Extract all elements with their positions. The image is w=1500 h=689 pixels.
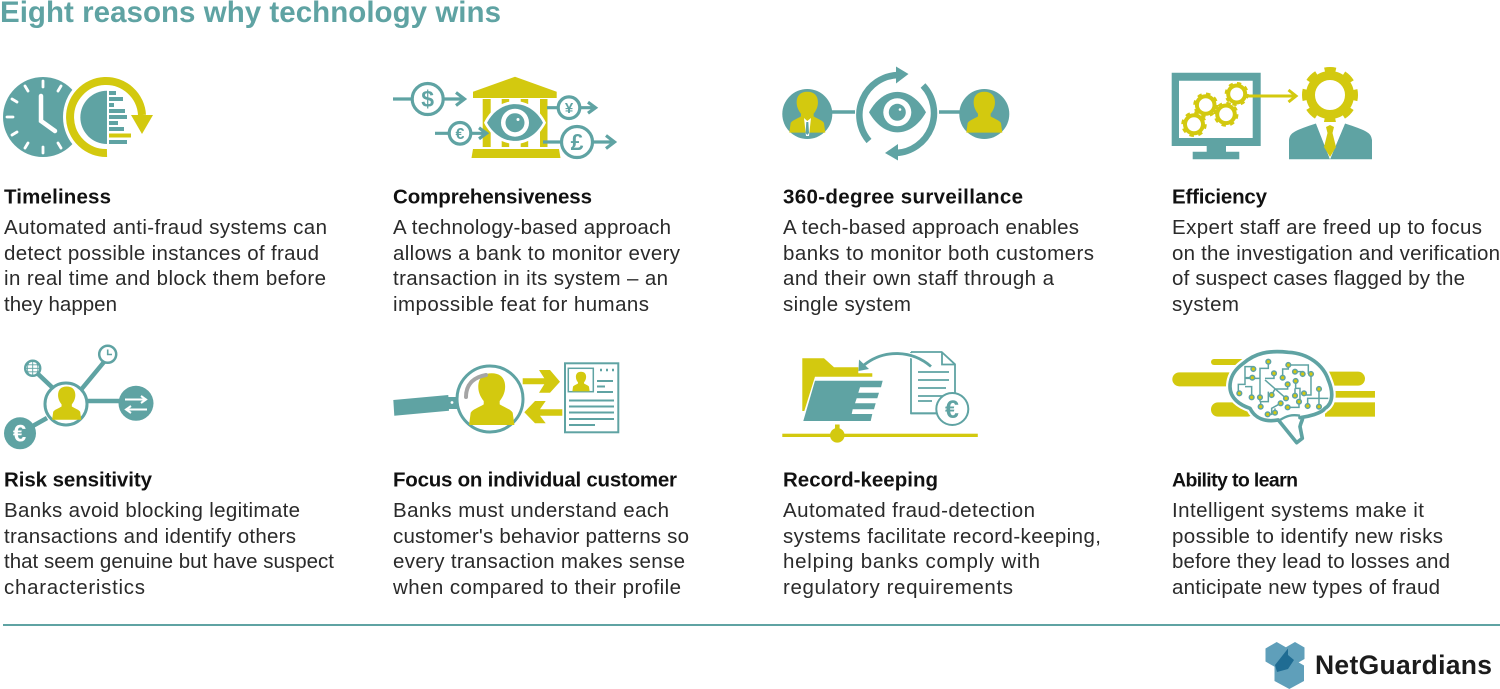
heading: Focus on individual customer xyxy=(393,468,677,492)
body text: helping banks comply with xyxy=(783,550,1040,573)
panel: record-keeping xyxy=(782,352,1101,599)
body text: allows a bank to monitor every xyxy=(393,242,681,265)
body text: A tech-based approach enables xyxy=(783,216,1079,239)
icon: bank with eye and currencies: $ xyxy=(421,86,434,112)
body text: that seem genuine but have suspect xyxy=(4,550,334,573)
body text: characteristics xyxy=(4,576,145,599)
body text: when compared to their profile xyxy=(392,576,681,599)
body text: systems facilitate record-keeping, xyxy=(783,525,1101,548)
body text: they happen xyxy=(4,293,117,316)
panel: focus on individual customer xyxy=(392,363,689,599)
heading: 360-degree surveillance xyxy=(783,186,1023,208)
heading: Comprehensiveness xyxy=(393,186,592,208)
body text: and their own staff through a xyxy=(783,267,1055,290)
body text: Automated fraud-detection xyxy=(783,499,1035,522)
body text: A technology-based approach xyxy=(393,216,671,239)
body text: Automated anti-fraud systems can xyxy=(4,216,327,239)
body text xyxy=(783,499,1101,599)
wordmark: NetGuardians xyxy=(1315,650,1492,680)
body text: in real time and block them before xyxy=(4,267,326,290)
icon: monitor with gears and gear-headed person xyxy=(1172,70,1372,159)
body text: possible to identify new risks xyxy=(1172,525,1443,548)
icon: clock and time arrow xyxy=(3,73,153,161)
heading: Ability to learn xyxy=(1172,470,1298,492)
body text: impossible feat for humans xyxy=(393,293,649,316)
body text: anticipate new types of fraud xyxy=(1172,576,1440,599)
logo: NetGuardians xyxy=(1266,642,1492,689)
body text: transaction in its system – an xyxy=(393,267,668,290)
panel: ability to learn xyxy=(1172,352,1450,599)
icon: magnifier and customer profile xyxy=(393,363,618,432)
body text: Intelligent systems make it xyxy=(1172,499,1424,522)
heading: Efficiency xyxy=(1172,186,1268,208)
body text xyxy=(1172,499,1450,599)
panel: timeliness xyxy=(3,73,327,316)
body text xyxy=(4,499,334,599)
body text: system xyxy=(1172,293,1239,316)
body text: Banks must understand each xyxy=(393,499,669,522)
heading: Record-keeping xyxy=(783,468,938,492)
icon: person network xyxy=(4,346,154,449)
body text: before they lead to losses and xyxy=(1172,550,1450,573)
panel: risk sensitivity xyxy=(4,346,334,599)
body text xyxy=(393,216,681,316)
body text: banks to monitor both customers xyxy=(783,242,1094,265)
body text xyxy=(1172,216,1500,316)
panel: 360-degree surveillance xyxy=(782,66,1094,316)
panel: comprehensiveness xyxy=(393,77,681,316)
body text: of suspect cases flagged by the xyxy=(1172,267,1465,290)
body text: customer's behavior patterns so xyxy=(393,525,689,548)
body text xyxy=(783,216,1094,316)
body text: on the investigation and verification xyxy=(1172,242,1500,265)
icon: folder, document and euro: € xyxy=(945,396,959,424)
icon: bank with eye and currencies: £ xyxy=(571,129,584,155)
icon: eye with circular arrows and two people xyxy=(782,66,1009,160)
icon: bank with eye and currencies: € xyxy=(456,126,465,143)
body text: every transaction makes sense xyxy=(393,550,685,573)
icon: bank with eye and currencies: ¥ xyxy=(565,100,574,117)
icon: circuit brain with speed bars xyxy=(1172,352,1375,443)
heading: Timeliness xyxy=(4,186,111,208)
heading: Risk sensitivity xyxy=(4,468,153,492)
body text xyxy=(4,216,327,316)
icon: person network: € xyxy=(13,420,26,448)
body text: Expert staff are freed up to focus xyxy=(1172,216,1482,239)
panel: efficiency xyxy=(1172,70,1500,316)
body text: detect possible instances of fraud xyxy=(4,242,319,265)
body text xyxy=(392,499,689,599)
body text: Banks avoid blocking legitimate xyxy=(4,499,300,522)
body text: single system xyxy=(783,293,911,316)
icon: folder, document and euro xyxy=(782,352,978,443)
body text: regulatory requirements xyxy=(783,576,1013,599)
body text: transactions and identify others xyxy=(4,525,296,548)
icon: bank with eye and currencies xyxy=(393,77,614,158)
icon: hexagon mark xyxy=(1266,642,1304,689)
